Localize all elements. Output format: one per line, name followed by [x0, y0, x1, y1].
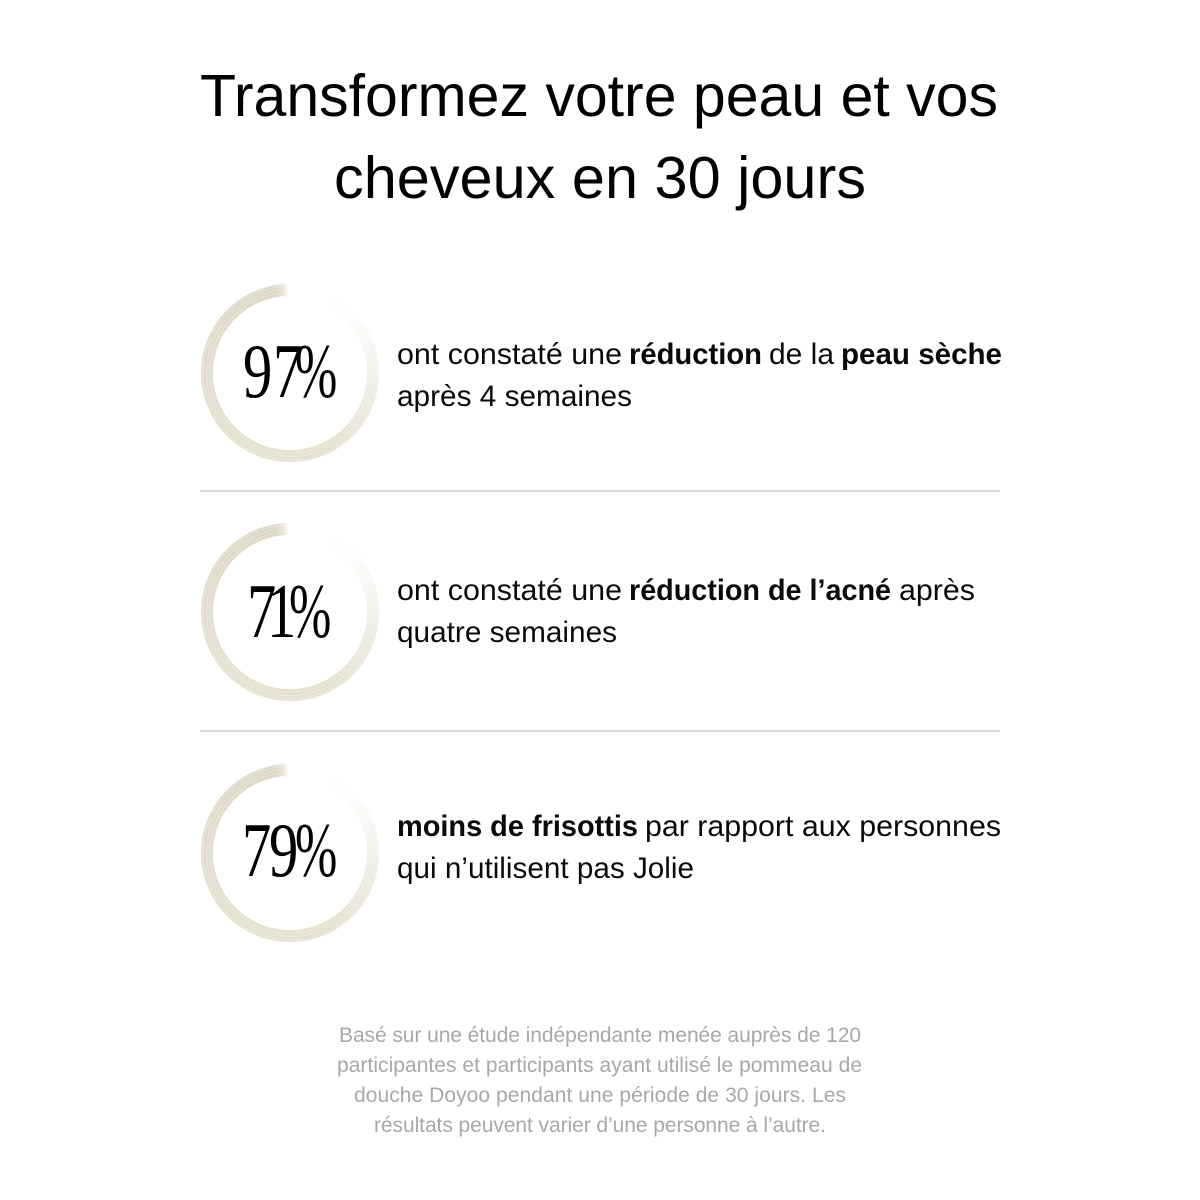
stat text 71%: réduction de l’acné — [629, 574, 891, 607]
footnote — [337, 1024, 862, 1137]
stat text 79%: % — [295, 809, 337, 894]
stat text 97%: après 4 semaines — [397, 380, 632, 413]
icon: brush ring 79% — [200, 763, 380, 943]
stat text 79%: qui n’utilisent pas Jolie — [397, 852, 694, 885]
stat text 79% — [242, 807, 1001, 894]
stat text 97%: 7 — [273, 328, 302, 414]
stat text 97%: % — [295, 330, 337, 415]
title: cheveux en 30 jours — [334, 145, 866, 211]
stat text 79%: 9 — [269, 807, 298, 893]
footnote: douche Doyoo pendant une période de 30 jours. Les — [354, 1084, 846, 1107]
title — [200, 63, 998, 211]
stat text 79%: 7 — [242, 807, 271, 893]
title: Transformez votre peau et vos — [200, 63, 998, 129]
stat text 71%: 1 — [267, 568, 296, 654]
stat text 97%: ont constaté une — [397, 338, 622, 371]
stat text 71%: après — [899, 574, 975, 607]
stat text 79%: par rapport aux personnes — [645, 810, 1001, 843]
footnote: résultats peuvent varier d’une personne à l’autre. — [374, 1114, 826, 1137]
footnote: Basé sur une étude indépendante menée auprès de 120 — [339, 1024, 861, 1047]
icon: brush ring 71% — [200, 522, 380, 702]
stat text 71%: 7 — [247, 568, 276, 654]
stat text 97%: 9 — [243, 328, 272, 414]
stat text 71%: quatre semaines — [397, 616, 617, 649]
panel: stat 71% — [200, 523, 975, 702]
stat text 97%: de la — [769, 338, 834, 371]
stat text 71%: ont constaté une — [397, 574, 622, 607]
stat text 97% — [243, 328, 1002, 415]
stat text 71% — [247, 568, 975, 655]
stat text 79%: moins de frisottis — [397, 810, 638, 843]
stat text 71%: % — [289, 570, 331, 655]
icon: brush ring 97% — [200, 283, 380, 463]
stat text 97%: réduction — [629, 338, 762, 371]
footnote: participantes et participants ayant utilisé le pommeau de — [337, 1054, 862, 1077]
stat text 97%: peau sèche — [841, 338, 1002, 371]
panel: stat 97% — [200, 284, 1002, 462]
panel: stat 79% — [200, 764, 1001, 942]
